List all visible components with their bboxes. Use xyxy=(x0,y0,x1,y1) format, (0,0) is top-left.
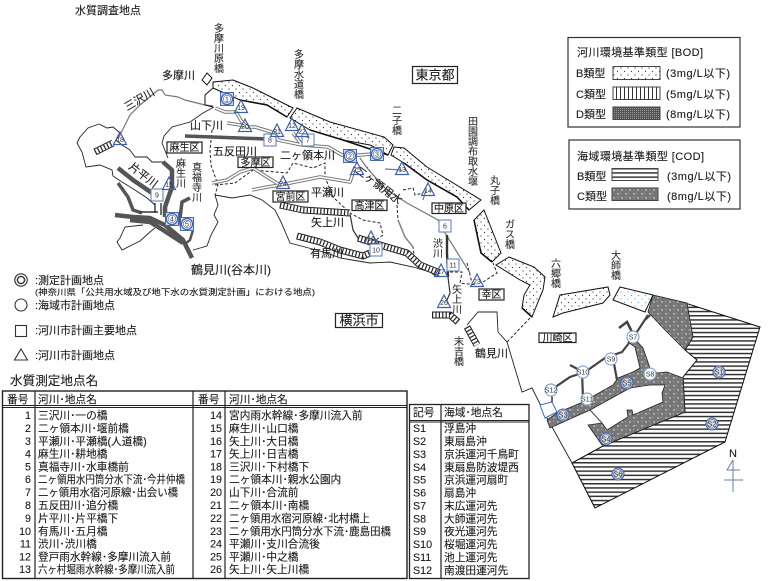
marker S5 xyxy=(621,377,633,389)
river sampling point markers xyxy=(114,92,484,308)
marker S4 xyxy=(600,433,612,445)
table rows left: 平瀬川･平瀬橋(人道橋) xyxy=(38,435,147,448)
marker S1: S1 xyxy=(715,370,723,376)
Yokohama box: 横浜市 xyxy=(339,313,379,328)
table rows right: 24 xyxy=(210,538,222,550)
marker S3 xyxy=(557,409,569,421)
marker 10: 10 xyxy=(372,248,380,254)
Tamagawa-harabashi label: 多摩川原橋 xyxy=(212,22,224,74)
marker 1 xyxy=(220,92,234,106)
table rows left: 3 xyxy=(25,436,31,448)
marker 20: 20 xyxy=(241,124,249,131)
marker 24: 24 xyxy=(279,181,287,188)
row C class: (5mg/L以下) xyxy=(666,89,730,101)
table rows right: 26 xyxy=(210,564,222,576)
table rows right: 16 xyxy=(210,436,222,448)
marker 26: 26 xyxy=(440,300,448,307)
sea table rows: 夜光運河先 xyxy=(444,525,498,538)
table rows right: 三沢川･下村橋下 xyxy=(229,460,309,474)
small white dock xyxy=(540,402,557,418)
sea table rows: 桜堀運河先 xyxy=(444,538,498,551)
row sea B class xyxy=(577,168,731,183)
sea table rows: S3 xyxy=(413,449,426,461)
table rows left: 二ヶ領用水宿河原線･出会い橋 xyxy=(38,486,178,499)
marker 2: 2 xyxy=(348,154,352,160)
Nikaryo main river label: 二ヶ領本川 xyxy=(280,148,335,162)
marker 8: 8 xyxy=(268,138,272,144)
sea table rows: S8 xyxy=(413,514,426,526)
Marukobashi label: 丸子橋 xyxy=(488,174,500,206)
map: coastal waters xyxy=(540,295,760,508)
marker 3: 3 xyxy=(375,152,379,158)
sea table rows: 東扇島防波堤西 xyxy=(444,461,519,474)
table rows right: 宮内雨水幹線･多摩川流入前 xyxy=(229,409,363,422)
sea table rows: S1 xyxy=(413,423,426,435)
title: 水質調査地点 xyxy=(75,3,141,17)
sea table rows: S10 xyxy=(413,539,432,551)
symbol: circle xyxy=(15,298,115,312)
marker 1: 1 xyxy=(225,96,229,104)
row D class xyxy=(576,107,730,121)
marker 22: 22 xyxy=(298,129,306,136)
marker 17: 17 xyxy=(437,269,445,276)
table rows left: 11 xyxy=(20,538,31,550)
Tsurumigawa label: 鶴見川 xyxy=(475,346,508,360)
marker 6: 6 xyxy=(443,224,447,230)
table rows left: 渋川･渋川橋 xyxy=(38,538,97,550)
marker S11: S11 xyxy=(581,396,593,404)
sea table rows: S6 xyxy=(413,488,426,500)
marker S10 xyxy=(577,366,589,378)
gray river lines xyxy=(118,90,470,273)
Miyamae ward box: 宮前区 xyxy=(276,190,306,203)
table rows right: 矢上川･日吉橋 xyxy=(229,448,299,460)
marker 10 xyxy=(370,244,382,256)
marker 19 xyxy=(234,100,248,112)
Katahiragawa label: 片平川 xyxy=(126,160,160,191)
map labels: river and bridge names xyxy=(122,22,620,367)
dark D-class Tsurumi upper rivers xyxy=(115,162,193,258)
legend: river BOD classes xyxy=(568,38,740,127)
marker 11 xyxy=(447,259,459,271)
marker 13 xyxy=(396,162,408,174)
marker 18: 18 xyxy=(116,137,124,144)
sea table header: 海域･地点名 xyxy=(444,406,503,419)
table rows left: 8 xyxy=(25,500,31,512)
Yagamigawa label: 矢上川 xyxy=(311,215,344,229)
table rows right: 22 xyxy=(210,513,222,525)
Saiwai ward box: 幸区 xyxy=(482,289,502,301)
marker 5: 5 xyxy=(185,222,189,228)
marker 23: 23 xyxy=(473,279,481,286)
table header xyxy=(7,393,288,406)
map: Tama River stippled B-class segments xyxy=(202,73,653,317)
marker S9: S9 xyxy=(607,356,615,364)
symbol legend xyxy=(14,273,315,362)
table rows right: 25 xyxy=(210,552,222,564)
sea table rows: 南渡田運河先 xyxy=(444,564,508,577)
table rows right: 21 xyxy=(210,500,222,512)
legend: sea COD classes xyxy=(569,140,740,209)
north arrow: N xyxy=(729,448,737,460)
marker 25: 25 xyxy=(353,167,361,174)
sea area C class upper xyxy=(648,295,693,350)
marker 9: 9 xyxy=(155,192,159,200)
marker S5: S5 xyxy=(623,380,631,388)
ward and city boundaries xyxy=(77,107,595,508)
Arimagawa label: 有馬川 xyxy=(310,246,343,260)
Tsurumigawa Yatomo label: 鶴見川(谷本川) xyxy=(191,263,271,277)
row D class: (8mg/L以下) xyxy=(666,109,730,121)
table: river sampling points xyxy=(2,391,407,578)
marker 20 xyxy=(238,119,252,132)
marker S12: S12 xyxy=(545,388,557,394)
marker S12 xyxy=(545,384,557,396)
table rows right: 二ヶ領用水円筒分水下流･鹿島田橋 xyxy=(229,525,391,538)
table rows right: 二ヶ領用水宿河原線･北村橋上 xyxy=(229,512,370,525)
table rows left xyxy=(19,409,185,576)
table rows left: 1 xyxy=(25,410,31,422)
row B class: B類型 xyxy=(576,66,605,80)
table header: 番号 xyxy=(7,394,29,406)
marker 8 xyxy=(264,134,276,146)
sea table rows: 浮島沖 xyxy=(444,422,476,435)
sea table rows: 末広運河先 xyxy=(444,500,498,512)
marker S8 xyxy=(644,368,656,380)
sea table header: 記号 xyxy=(413,407,435,419)
symbol note: (神奈川県「公共用水域及び地下水の水質測定計画」における地点) xyxy=(35,286,315,297)
double gray rivers xyxy=(185,108,372,190)
sea area hatched B class xyxy=(572,303,760,508)
marker 19: 19 xyxy=(237,105,245,112)
table rows left: 五反田川･追分橋 xyxy=(38,499,118,512)
sea sampling point markers xyxy=(545,331,725,480)
thin canals xyxy=(551,315,650,423)
symbol: square: :河川市計画主要地点 xyxy=(35,323,137,337)
marker 5 xyxy=(180,218,194,230)
row sea B class: (3mg/L以下) xyxy=(667,171,731,183)
sea table rows: S12 xyxy=(413,565,432,577)
marker 6 xyxy=(439,220,451,232)
table rows right: 15 xyxy=(210,423,222,435)
table rows left: 真福寺川･水車橋前 xyxy=(38,460,129,474)
sea table rows: 扇島沖 xyxy=(444,486,476,500)
Takatsu ward box: 高津区 xyxy=(354,199,384,212)
marker 26 xyxy=(438,295,450,308)
Yamashitagawa label: 山下川 xyxy=(190,119,223,132)
table: sea sampling points xyxy=(410,404,529,578)
marker S9 xyxy=(605,353,617,365)
table rows right: 麻生川･山口橋 xyxy=(229,422,299,435)
symbol: circle: :海域市計画地点 xyxy=(35,298,115,312)
lower river lines xyxy=(350,214,450,300)
table rows left: 6 xyxy=(25,474,31,486)
Kawasaki ward box: 川崎区 xyxy=(542,332,572,344)
marker 23 xyxy=(470,274,484,286)
table rows left: 麻生川･耕地橋 xyxy=(38,448,108,460)
marker 9 xyxy=(151,189,163,201)
sea table rows: 大師運河先 xyxy=(444,512,498,526)
marker 14: 14 xyxy=(424,188,432,195)
marker 18 xyxy=(114,132,126,144)
table rows right xyxy=(210,409,391,576)
sea table rows: 京浜運河扇町 xyxy=(444,474,508,486)
Tamagawa label: 多摩川 xyxy=(162,68,195,82)
marker 16 xyxy=(364,231,378,244)
symbol: triangle: :河川市計画地点 xyxy=(35,348,115,362)
marker S1 xyxy=(713,366,725,378)
Misawagawa label: 三沢川 xyxy=(122,85,157,114)
marker S11 xyxy=(581,393,593,405)
symbol: double circle xyxy=(15,273,104,287)
sea table rows: 京浜運河千鳥町 xyxy=(444,448,519,461)
marker 4: 4 xyxy=(170,216,174,224)
marker 3 xyxy=(370,148,384,160)
marker 17 xyxy=(434,264,448,276)
marker 13: 13 xyxy=(398,167,406,174)
north arrow xyxy=(724,448,743,492)
row sea C class xyxy=(577,188,731,203)
table rows left: 三沢川･一の橋 xyxy=(38,409,108,422)
Aso ward box: 麻生区 xyxy=(170,141,200,154)
marker S6 xyxy=(612,468,624,480)
row B class: (3mg/L以下) xyxy=(666,68,730,80)
marker 4 xyxy=(166,212,178,226)
Asogawa label: 麻生川 xyxy=(174,158,186,188)
row C class xyxy=(576,87,730,101)
row B class xyxy=(576,66,730,80)
table header: 番号 xyxy=(198,394,220,406)
marker S7: S7 xyxy=(629,334,637,342)
table rows left: 二ヶ領用水円筒分水下流･今井仲橋 xyxy=(38,473,185,486)
marker 21: 21 xyxy=(273,129,281,136)
table header: 河川･地点名 xyxy=(38,393,97,406)
marker 12 xyxy=(286,118,298,130)
Gasubashi label: ガス橋 xyxy=(502,219,514,250)
table rows left: 12 xyxy=(19,552,31,564)
row sea C class: (8mg/L以下) xyxy=(667,191,731,203)
table rows right: 平瀬川･支川合流後 xyxy=(229,538,320,550)
table rows right: 矢上川･大日橋 xyxy=(229,435,299,448)
sea table rows: 池上運河先 xyxy=(444,551,498,564)
map labels: ward and city boxes xyxy=(167,66,576,344)
table rows left: 二ヶ領本川･堰前橋 xyxy=(38,422,129,435)
symbol: double circle: :測定計画地点 xyxy=(35,273,104,287)
sea table rows: S4 xyxy=(413,462,426,474)
sea table rows: S5 xyxy=(413,474,426,486)
marker S10: S10 xyxy=(577,370,589,376)
table rows right: 19 xyxy=(210,474,222,486)
table rows right: 平瀬川･中之橋 xyxy=(229,550,299,564)
table rows left: 10 xyxy=(19,526,31,538)
marker 14 xyxy=(422,183,434,196)
map: inland Kawasaki rivers and boundaries xyxy=(77,90,595,508)
table rows left: 2 xyxy=(25,423,31,435)
table rows left: 有馬川･五月橋 xyxy=(38,525,108,538)
Denenchofu weir label: 田園調布取水堰 xyxy=(466,116,478,187)
table rows right: 山下川･合流前 xyxy=(229,486,299,499)
marker S2: S2 xyxy=(708,422,716,428)
table rows right: 二ヶ領本川･親水公園内 xyxy=(229,473,341,486)
marker S8: S8 xyxy=(646,372,654,378)
Shibukawa label: 渋川 xyxy=(430,237,442,258)
Shinpukujigawa label: 真福寺川 xyxy=(190,161,202,202)
marker 12: 12 xyxy=(288,123,296,130)
sea table rows: S9 xyxy=(413,526,426,538)
Tama ward box: 多摩区 xyxy=(240,156,270,169)
sea table rows: S7 xyxy=(413,500,426,512)
sea table rows: 東扇島沖 xyxy=(444,435,487,448)
marker S7 xyxy=(627,331,639,343)
table rows right: 23 xyxy=(210,526,222,538)
table rows left: 登戸雨水幹線･多摩川流入前 xyxy=(38,550,171,564)
table rows left: 4 xyxy=(25,448,31,460)
table rows right: 14 xyxy=(210,410,222,422)
Futakobashi label: 二子橋 xyxy=(390,105,402,136)
table rows left: 六ヶ村堀雨水幹線･多摩川流入前 xyxy=(38,563,175,576)
marker 22 xyxy=(296,124,308,136)
table heading: 水質測定地点名 xyxy=(10,373,98,388)
table rows right: 18 xyxy=(210,462,222,474)
table rows right: 二ヶ領本川･南橋 xyxy=(229,499,309,512)
Rokugobashi label: 六郷橋 xyxy=(548,257,560,289)
Hirasegawa label: 平瀬川 xyxy=(311,185,344,199)
table rows left: 9 xyxy=(25,513,31,525)
Sueyoshibashi label: 末吉橋 xyxy=(452,335,464,367)
row D class: D類型 xyxy=(576,107,606,121)
sea table rows xyxy=(413,422,519,577)
Tokyo box: 東京都 xyxy=(415,68,455,82)
marker 24 xyxy=(276,176,290,188)
marker 7: 7 xyxy=(306,138,310,144)
Gotandagawa label: 五反田川 xyxy=(213,146,257,158)
dashed boundaries xyxy=(210,130,530,342)
marker 7 xyxy=(302,134,314,146)
marker 16: 16 xyxy=(367,236,375,243)
hatched C-class river segments xyxy=(95,143,477,345)
table rows left: 13 xyxy=(19,564,31,576)
legend heading BOD: 河川環境基準類型 [BOD] xyxy=(577,45,703,59)
marker 15 xyxy=(162,177,176,190)
table rows left: 5 xyxy=(25,462,31,474)
table rows right: 矢上川･矢上川橋 xyxy=(229,563,309,576)
Tama-suidobashi label: 多摩水道橋 xyxy=(292,48,304,100)
marker S2 xyxy=(706,418,718,430)
row C class: C類型 xyxy=(576,87,606,101)
symbol: triangle xyxy=(14,348,115,362)
table rows right: 20 xyxy=(210,487,222,499)
lower Yagamigawa label: 矢上川 xyxy=(450,283,462,314)
table rows left: 7 xyxy=(25,487,31,499)
Daishibashi label: 大師橋 xyxy=(608,249,620,281)
sea table rows: S11 xyxy=(413,552,431,564)
marker 25 xyxy=(350,162,364,174)
marker 11: 11 xyxy=(449,262,457,270)
marker S4: S4 xyxy=(602,436,610,444)
marker S3: S3 xyxy=(559,412,567,420)
sea area C class canals xyxy=(547,337,685,445)
table rows right: 17 xyxy=(210,448,222,460)
marker S6: S6 xyxy=(614,472,622,478)
Kawasaki ward box xyxy=(539,332,576,344)
legend heading COD: 海域環境基準類型 [COD] xyxy=(577,149,704,163)
marker 15: 15 xyxy=(165,182,173,189)
marker 21 xyxy=(270,124,284,136)
row sea C class: C類型 xyxy=(577,189,607,203)
sea table rows: S2 xyxy=(413,436,426,448)
sea table header xyxy=(413,406,503,419)
table header: 河川･地点名 xyxy=(229,393,288,406)
Nikaryo canal label: 二ヶ領用水 xyxy=(353,163,405,207)
Nakahara ward box: 中原区 xyxy=(434,202,464,215)
marker 2 xyxy=(344,150,356,162)
table rows left: 片平川･片平橋下 xyxy=(38,512,118,525)
row sea B class: B類型 xyxy=(577,169,606,183)
